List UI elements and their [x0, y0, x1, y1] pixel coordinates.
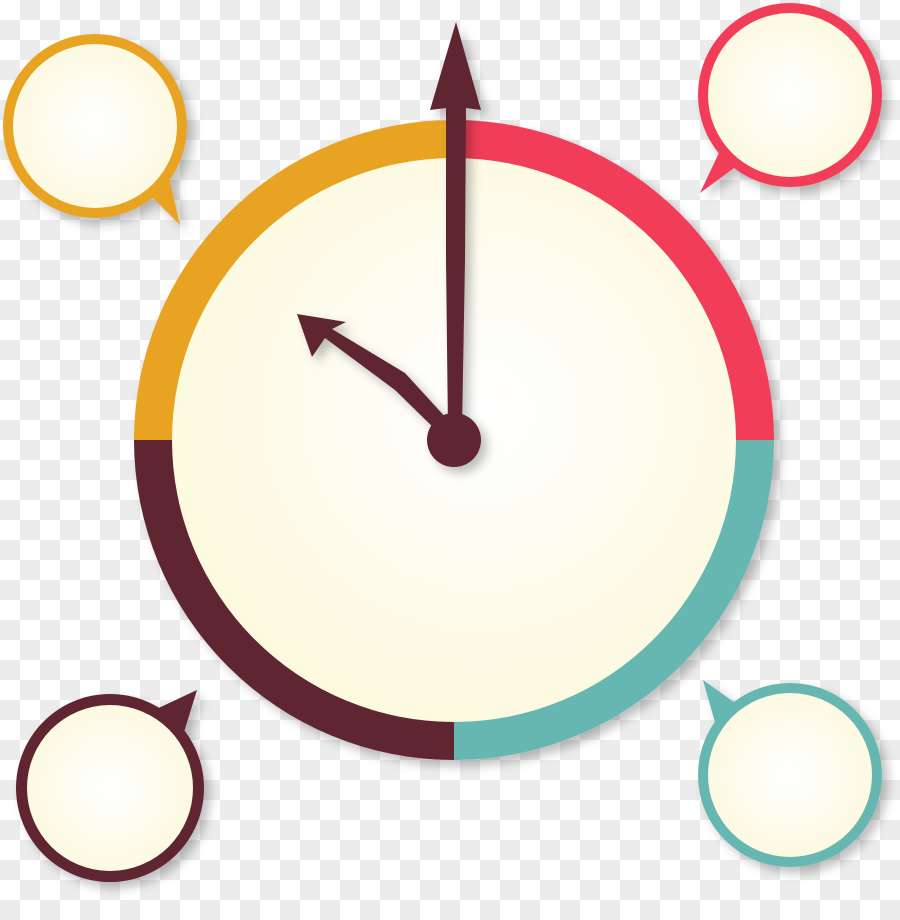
minute hand [430, 22, 481, 430]
bubble: teal bottom-right [698, 680, 882, 867]
bubble: orange top-left [3, 34, 187, 225]
clock face [172, 158, 736, 722]
hour hand [297, 314, 448, 432]
clock ring [134, 120, 774, 760]
bubble: maroon bottom-left [16, 690, 204, 882]
clock hands [297, 22, 481, 467]
bubble: red top-right [698, 3, 882, 193]
center pin [427, 413, 481, 467]
